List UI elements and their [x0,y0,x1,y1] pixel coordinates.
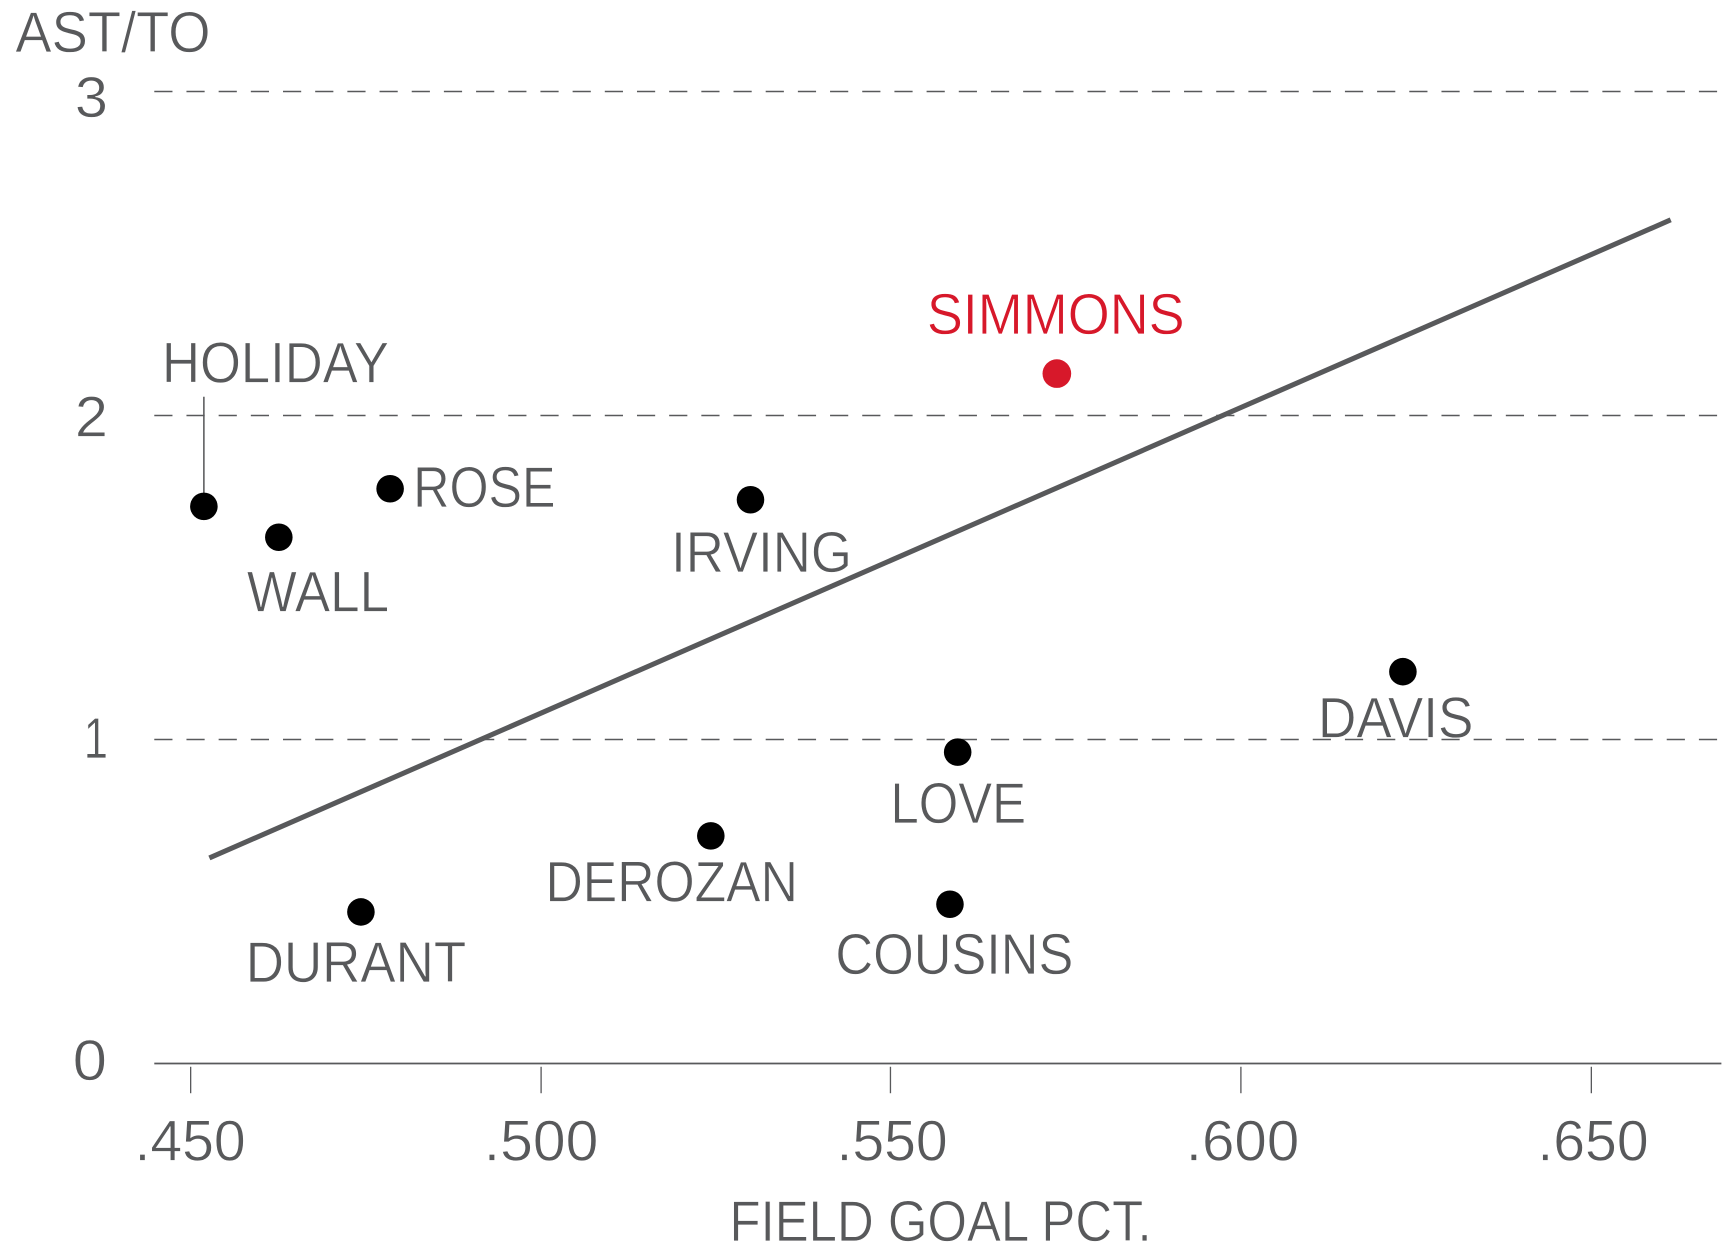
y axis gridlines and tick labels: 0 [73,1029,107,1093]
y axis gridlines and tick labels: 2 [75,385,108,449]
trend line [209,220,1671,858]
x axis with ticks and labels: .650 [1537,1109,1649,1173]
player: Cousins: COUSINS [835,923,1073,987]
player: Davis [1318,658,1473,750]
player: Durant: DURANT [246,931,466,995]
player: Durant [246,898,466,995]
player: Simmons (highlighted) [927,283,1185,388]
x axis with ticks and labels: .600 [1186,1109,1299,1173]
y axis gridlines and tick labels: 3 [75,66,108,130]
player: DeRozan [546,822,798,914]
player: Simmons (highlighted): SIMMONS [927,283,1185,347]
player: DeRozan: DEROZAN [546,850,798,914]
y axis title: AST/TO [15,1,210,65]
y axis gridlines and tick labels [73,66,1724,1093]
y axis gridlines and tick labels: 1 [84,707,108,771]
player: Davis: DAVIS [1318,686,1473,750]
player: Holiday: HOLIDAY [162,331,389,395]
player: Rose: ROSE [413,456,555,520]
x axis with ticks and labels: .500 [484,1109,598,1173]
player: Wall [247,523,389,625]
x axis with ticks and labels [134,1063,1721,1173]
x axis with ticks and labels: .550 [836,1109,948,1173]
player: Irving: IRVING [671,521,852,585]
player: Wall: WALL [247,561,389,625]
player: Love [890,738,1026,836]
player: Irving [671,486,852,585]
player: Holiday [162,331,389,520]
x axis with ticks and labels: .450 [134,1109,246,1173]
player: Cousins [835,890,1073,987]
player: Love: LOVE [890,772,1026,836]
